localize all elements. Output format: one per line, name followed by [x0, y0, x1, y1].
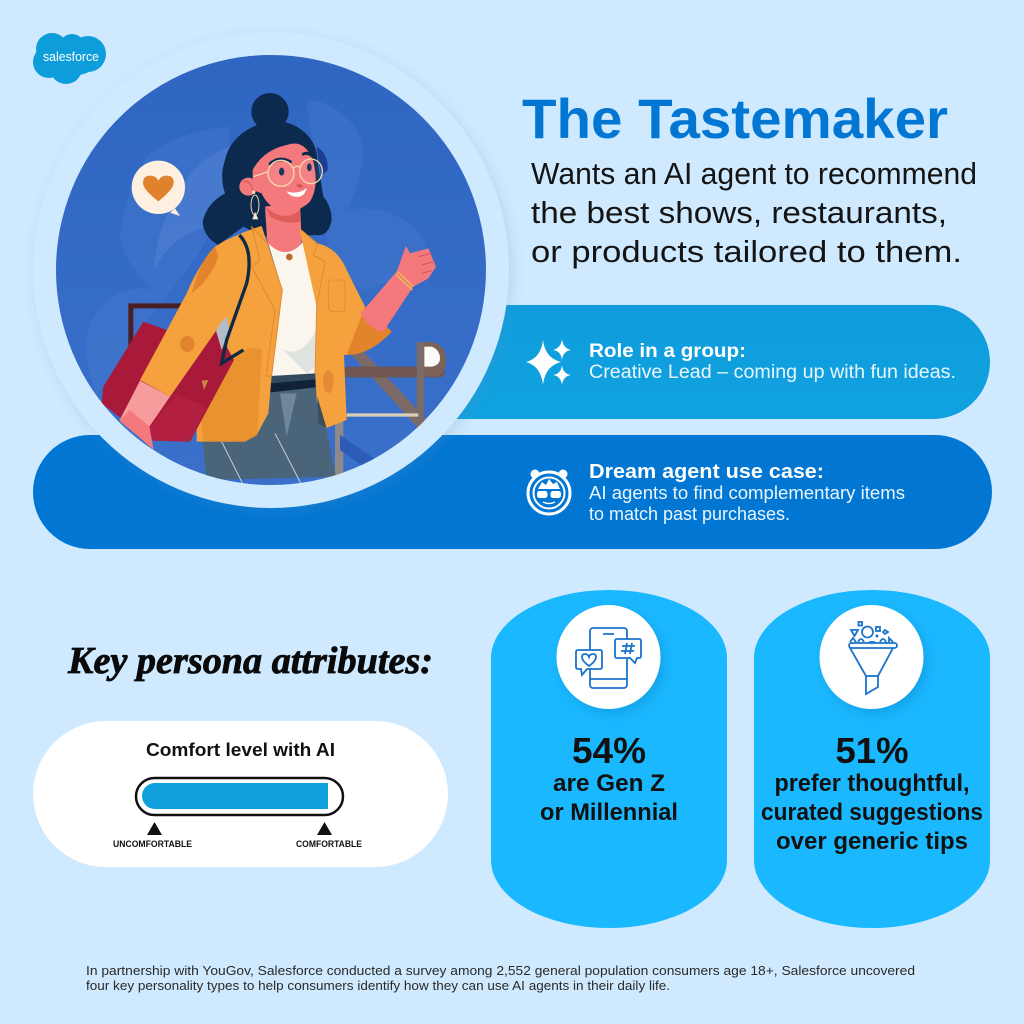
stat label: or Millennial	[540, 799, 678, 826]
stat label: prefer thoughtful,	[774, 770, 970, 797]
panel: comfort level	[33, 721, 448, 867]
hand	[397, 246, 436, 287]
white shirt	[268, 242, 317, 376]
dream agent description: AI agents to find complementary items	[589, 483, 905, 503]
marker: comfortable: COMFORTABLE	[296, 839, 362, 850]
illustration: woman with bag	[56, 55, 486, 485]
icon: agent face	[528, 470, 570, 514]
role description: Creative Lead – coming up with fun ideas.	[589, 362, 956, 383]
left forearm and hand	[119, 381, 170, 449]
bench left frame	[128, 303, 183, 347]
footnote	[86, 964, 915, 993]
stat label: curated suggestions	[761, 799, 983, 826]
jacket sleeve	[140, 238, 233, 397]
circle frame	[33, 32, 509, 508]
stat: 51%: 51%	[836, 730, 908, 771]
panel: Gen Z stat	[491, 590, 727, 928]
bench right rail	[335, 342, 446, 477]
jacket right side	[299, 228, 392, 428]
subtitle: Wants an AI agent to recommend	[531, 156, 977, 191]
panel: curated suggestions stat	[754, 590, 990, 928]
stat label	[761, 770, 983, 855]
subtitle: or products tailored to them.	[531, 234, 962, 269]
dream agent heading: Dream agent use case:	[589, 461, 824, 483]
dream agent description: to match past purchases.	[589, 504, 790, 524]
marker: uncomfortable	[113, 822, 192, 850]
necklace pendant	[286, 254, 293, 260]
comfort heading: Comfort level with AI	[146, 739, 335, 760]
icon: sparkles	[526, 339, 571, 385]
red bag	[102, 322, 234, 442]
speech bubble with heart	[132, 161, 185, 216]
stat: 54%: 54%	[572, 730, 646, 771]
panel: role in a group	[400, 305, 990, 419]
neck	[265, 206, 302, 252]
icon: phone with chat bubbles	[556, 605, 660, 709]
dream agent description	[589, 483, 905, 524]
jacket left body	[197, 226, 282, 442]
bag strap	[222, 235, 249, 363]
icon: funnel	[820, 605, 924, 709]
glasses	[253, 159, 322, 186]
logo: salesforce: salesforce	[43, 49, 99, 64]
logo: salesforce	[33, 33, 106, 84]
ghost smoke shapes	[125, 101, 370, 210]
eyebrows and eyes	[268, 152, 313, 176]
panel: dream agent use case	[33, 435, 992, 549]
jeans	[203, 380, 336, 480]
footnote: In partnership with YouGov, Salesforce conducted a survey among 2,552 general population consumers age 18+, Salesforce uncovered	[86, 964, 915, 978]
footnote: four key personality types to help consumers identify how they can use AI agents in their daily life.	[86, 979, 670, 993]
belt	[269, 379, 315, 393]
marker: comfortable	[296, 822, 362, 850]
smile	[287, 188, 307, 197]
heading: key persona attributes: Key persona attributes:	[67, 640, 433, 682]
right arm	[361, 272, 413, 332]
comfort bar	[136, 778, 343, 815]
stat label: over generic tips	[776, 828, 968, 855]
earring	[251, 191, 259, 219]
title: The Tastemaker	[522, 87, 948, 150]
stat label	[540, 770, 678, 826]
hair and bun	[203, 93, 332, 245]
role heading: Role in a group:	[589, 341, 746, 362]
subtitle	[531, 156, 977, 269]
subtitle: the best shows, restaurants,	[531, 195, 947, 230]
stat label: are Gen Z	[553, 770, 665, 797]
face	[253, 144, 316, 212]
marker: uncomfortable: UNCOMFORTABLE	[113, 839, 192, 850]
